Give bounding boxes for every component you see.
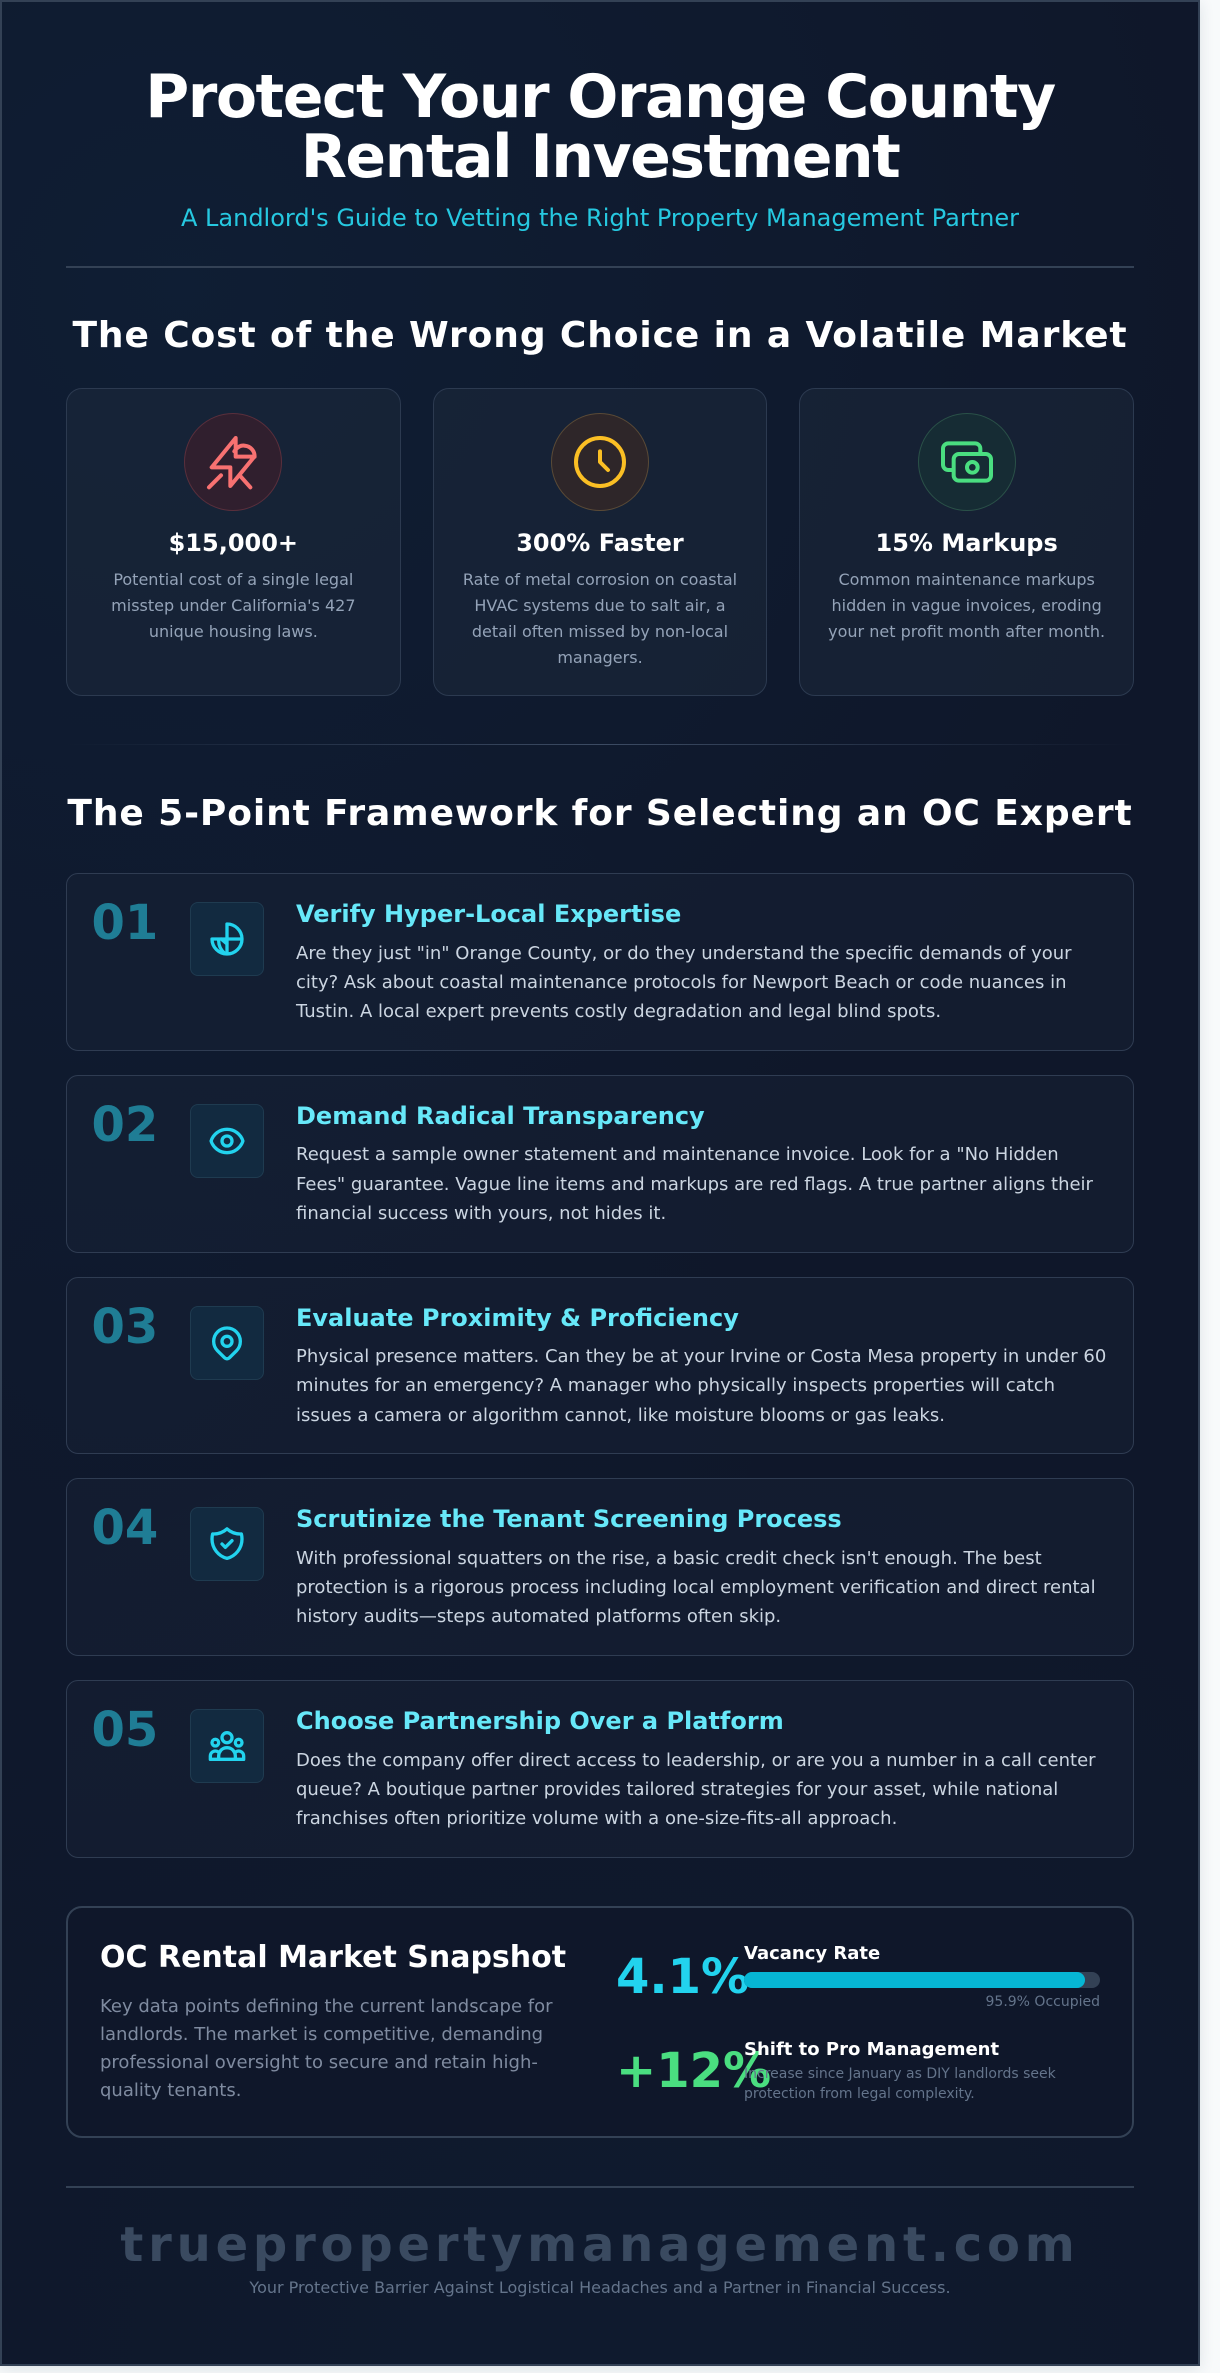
step text: financial success with yours, not hides it. [296,1203,666,1224]
step text: Physical presence matters. Can they be at your Irvine or Costa Mesa property in under 60 [296,1346,1106,1367]
stat: $15,000+ [169,529,298,557]
step text: Request a sample owner statement and maintenance invoice. Look for a "No Hidden [296,1144,1059,1165]
footer brand: truepropertymanagement.com [120,2217,1080,2273]
step text: protection is a rigorous process including local employment verification and direct rental [296,1577,1096,1598]
description: managers. [557,648,643,666]
heading: cost of the wrong choice: The Cost of the Wrong Choice in a Volatile Market [72,315,1128,356]
step text: queue? A boutique partner provides tailored strategies for your asset, while national [296,1779,1058,1800]
panel: step 05 [66,1680,1134,1858]
step text [296,1750,1096,1829]
step text: Are they just "in" Orange County, or do they understand the specific demands of your [296,943,1072,964]
step text: minutes for an emergency? A manager who physically inspects properties will catch [296,1375,1055,1396]
description: Rate of metal corrosion on coastal [463,570,737,588]
panel: step 02 [66,1075,1134,1252]
stat: pro management value: +12% [616,2043,771,2099]
panel: cost card 2 [433,388,767,696]
description: HVAC systems due to salt air, a [474,596,726,614]
stat: 15% Markups [876,529,1058,557]
title [145,62,1056,192]
description: hidden in vague invoices, eroding [831,596,1102,614]
description: misstep under California's 427 [111,596,356,614]
icon: location pin [190,1306,264,1380]
description [463,570,737,666]
description: detail often missed by non-local [472,622,728,640]
description: Common maintenance markups [838,570,1095,588]
step text: history audits—steps automated platforms often skip. [296,1606,781,1627]
panel: step 03 [66,1276,1134,1454]
step text: franchises often prioritize volume with a one-size-fits-all approach. [296,1808,897,1829]
panel: step 01 [66,873,1134,1051]
icon: eye [190,1104,264,1178]
step text [296,943,1072,1022]
heading: 5-point framework: The 5-Point Framework for Selecting an OC Expert [67,792,1133,834]
panel: step 04 [66,1478,1134,1656]
panel: cost card 1 [66,388,401,696]
icon: shield check [190,1507,264,1581]
step text: city? Ask about coastal maintenance protocols for Newport Beach or code nuances in [296,972,1067,993]
step text: With professional squatters on the rise, a basic credit check isn't enough. The best [296,1548,1042,1569]
description [111,570,356,640]
snapshot text: professional oversight to secure and retain high- [100,2052,538,2073]
number: 03 [92,1298,158,1354]
step title: Scrutinize the Tenant Screening Process [296,1505,842,1533]
snapshot text [100,1996,552,2101]
number: 01 [92,895,158,951]
description: your net profit month after month. [828,622,1105,640]
step title: Choose Partnership Over a Platform [296,1707,784,1735]
step text [296,1548,1096,1627]
stat: vacancy value: 4.1% [616,1949,749,2005]
snapshot heading: OC Rental Market Snapshot [100,1940,566,1974]
stat: 300% Faster [516,529,684,557]
panel: cost card 3 [799,388,1134,696]
panel: market snapshot [66,1906,1134,2138]
snapshot text: landlords. The market is competitive, demanding [100,2024,543,2045]
stat: pro management text [744,2066,1056,2102]
occupancy bar [744,1972,1100,1988]
step title: Evaluate Proximity & Proficiency [296,1304,739,1332]
subtitle: A Landlord's Guide to Vetting the Right Property Management Partner [181,204,1019,232]
description: unique housing laws. [149,622,318,640]
occupancy label: 95.9% Occupied [986,1994,1100,2010]
description: Potential cost of a single legal [113,570,353,588]
description [828,570,1105,640]
stat: pro management text: Increase since January as DIY landlords seek [744,2066,1056,2082]
stat: vacancy label: Vacancy Rate [744,1943,880,1964]
icon: people group [190,1709,264,1783]
step title: Verify Hyper-Local Expertise [296,900,681,928]
snapshot text: Key data points defining the current landscape for [100,1996,552,2017]
step text: Tustin. A local expert prevents costly degradation and legal blind spots. [296,1001,941,1022]
step text: Fees" guarantee. Vague line items and markups are red flags. A true partner aligns their [296,1174,1093,1195]
title: Protect Your Orange County [145,62,1055,132]
number: 05 [92,1702,158,1758]
step text: Does the company offer direct access to leadership, or are you a number in a call center [296,1750,1096,1771]
title: Rental Investment [301,122,899,192]
step title: Demand Radical Transparency [296,1102,705,1130]
footer tagline: Your Protective Barrier Against Logistical Headaches and a Partner in Financial Success. [249,2278,951,2297]
stat: pro management label: Shift to Pro Management [744,2039,999,2060]
icon: legal bolt [184,413,282,511]
number: 04 [92,1500,158,1556]
stat: pro management text: protection from legal complexity. [744,2086,975,2102]
step text [296,1144,1093,1224]
icon: pie [190,902,264,976]
number: 02 [92,1097,158,1153]
step text [296,1346,1106,1426]
icon: clock [551,413,649,511]
step text: issues a camera or algorithm cannot, like moisture blooms or gas leaks. [296,1405,945,1426]
icon: cash [918,413,1016,511]
snapshot text: quality tenants. [100,2080,241,2101]
